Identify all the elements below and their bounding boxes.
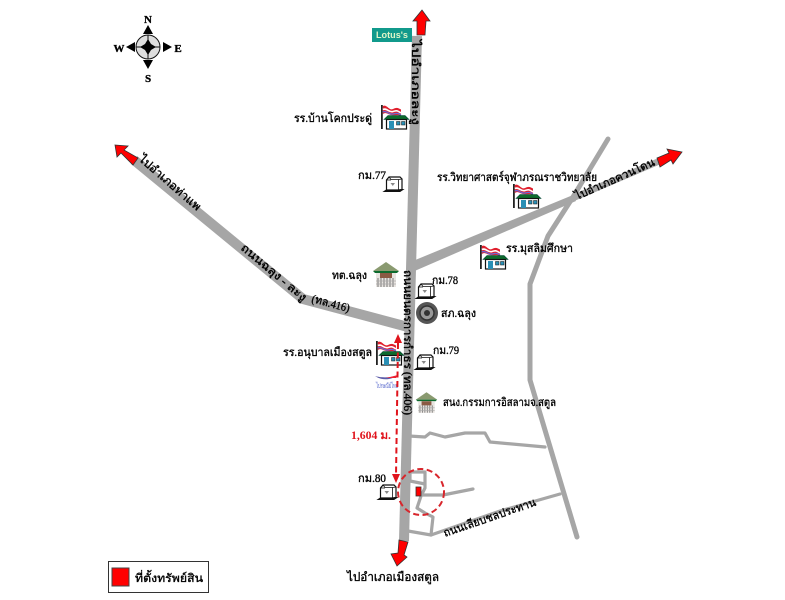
canal road lower <box>408 494 560 535</box>
Chalung municipality <box>332 262 399 287</box>
road label: highway 416: (ทล.416) <box>310 293 351 315</box>
Islamic committee office <box>416 392 556 413</box>
side road upper <box>409 433 545 447</box>
km 78 marker: กม.78 <box>432 275 458 287</box>
school: Anuban Mueang Satun: รร.อนุบาลเมืองสตูล <box>283 346 372 359</box>
road label: Yontrakan Kamthon road: ถนนยนตรการกำธร (ทล.406) <box>401 270 414 415</box>
north arrow: Lotus's direction <box>413 10 430 35</box>
km 80 marker: กม.80 <box>358 473 386 485</box>
Chalung police station: สภ.ฉลุง <box>441 308 476 320</box>
east arrow: Khuan Don direction <box>657 149 682 167</box>
road label: irrigation canal road: ถนนเลียบชลประทาน <box>442 496 538 540</box>
Chalung municipality: ทต.ฉลุง <box>332 270 367 282</box>
road label: to Khuan Don: ไปอำเภอควนโดน <box>572 155 657 203</box>
km 79 marker <box>415 345 459 370</box>
km 80 marker <box>358 473 397 500</box>
road label: Chalung - La-ngu road: ถนนฉลุง - ละงู <box>238 242 309 304</box>
compass rose <box>114 14 182 85</box>
local branch roads <box>410 472 473 535</box>
Chalung police station <box>416 302 476 324</box>
school: Anuban Mueang Satun <box>283 341 404 365</box>
school: Muslim Suksa: รร.มุสลิมศึกษา <box>506 242 573 255</box>
west road: highway 416 <box>134 160 408 327</box>
property marker <box>416 487 421 496</box>
school: Ban Khok Pradu <box>294 105 409 129</box>
school: Ban Khok Pradu: รร.บ้านโคกประดู่ <box>294 111 372 125</box>
km 77 marker <box>358 170 403 192</box>
legend: ที่ตั้งทรัพย์สิน <box>135 570 203 585</box>
road label: to Tha Phae: ไปอำเภอท่าแพ <box>135 152 203 213</box>
km 77 marker: กม.77 <box>358 170 386 182</box>
Islamic committee office: สนง.กรรมการอิสลามจ.สตูล <box>443 396 556 409</box>
compass letters <box>114 14 182 85</box>
distance label: 1,604 ม. <box>351 430 391 442</box>
compass letters: N <box>144 14 152 26</box>
eastern branch road <box>530 139 608 537</box>
distance dimension arrow <box>392 334 402 483</box>
main road: highway 406 <box>404 36 417 541</box>
Lotus's logo <box>372 28 412 42</box>
Lotus's logo: Lotus's <box>376 30 408 41</box>
compass letters: S <box>145 73 151 85</box>
school: Princess Chulabhorn Science: รร.วิทยาศาสตร์จุฬาภรณราชวิทยาลัย <box>437 170 597 184</box>
km 79 marker: กม.79 <box>433 345 459 357</box>
legend <box>108 562 208 592</box>
school: Muslim Suksa <box>480 242 573 269</box>
property location circle <box>398 469 444 515</box>
south arrow: Mueang Satun direction <box>391 540 408 566</box>
road label: to La-ngu: ไปอำเภอละงู <box>409 39 422 125</box>
school: Princess Chulabhorn Science <box>437 170 597 208</box>
destination label: Mueang Satun: ไปอำเภอเมืองสตูล <box>346 570 439 585</box>
compass letters: E <box>174 43 182 55</box>
compass letters: W <box>114 43 124 55</box>
Thailand Post logo: ไปรษณีย์ไทย <box>375 381 398 390</box>
Thailand Post logo <box>375 375 398 390</box>
northwest arrow: Tha Phae direction <box>115 145 138 165</box>
east road <box>408 195 576 273</box>
roads network <box>134 36 662 541</box>
km 78 marker <box>416 275 458 298</box>
